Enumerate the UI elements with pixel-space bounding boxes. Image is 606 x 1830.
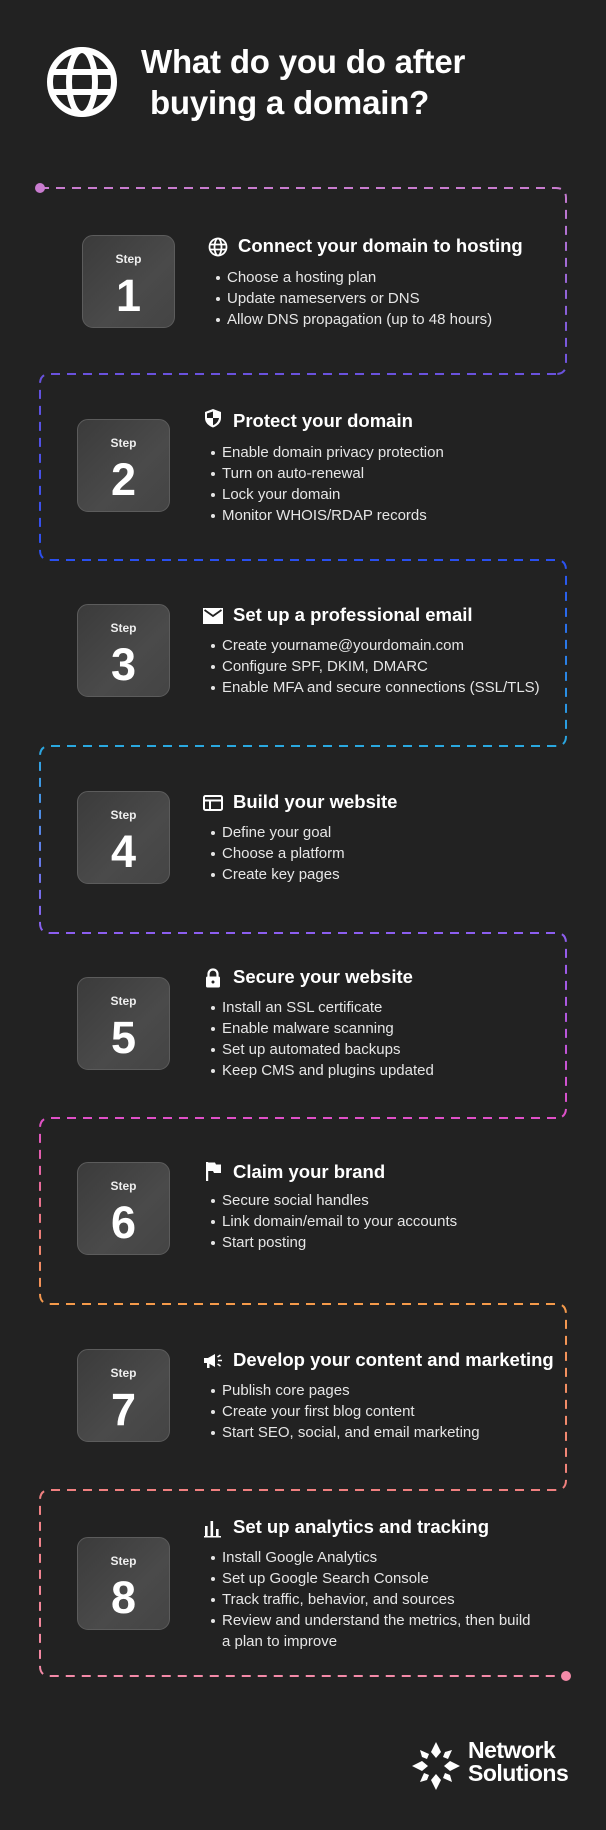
step 2 [77,409,444,524]
step 6: Link domain/email to your accounts [222,1213,457,1230]
logo: Network Solutions [412,1737,568,1790]
icon: padlock [206,968,220,988]
step 3: 3 [111,639,136,690]
step 5: Enable malware scanning [222,1020,394,1037]
icon: megaphone [204,1354,222,1368]
step 4 [77,791,397,884]
step 2: 2 [111,454,136,505]
step 3: Step [110,621,136,635]
step 5: Set up automated backups [222,1041,400,1058]
step 4: Create key pages [222,866,340,883]
step 5: Step [110,994,136,1008]
step 3: Create yourname@yourdomain.com [222,637,464,654]
logo: Network Solutions: Network [468,1737,555,1763]
step 7: Publish core pages [222,1382,350,1399]
step 7 [77,1349,554,1442]
title: What do you do after [141,43,465,80]
step 5: Keep CMS and plugins updated [222,1062,434,1079]
step 3: Configure SPF, DKIM, DMARC [222,658,428,675]
icon: flag [206,1162,221,1181]
step 8: Set up Google Search Console [222,1570,429,1587]
icon: shield [205,409,221,428]
title: buying a domain? [150,84,429,121]
step 2: Step [110,436,136,450]
step 2: Lock your domain [222,486,340,503]
step 5: Install an SSL certificate [222,999,382,1016]
step 6: Step [110,1179,136,1193]
logo: Network Solutions: Solutions [468,1760,568,1786]
step 6 [77,1161,457,1255]
step 1: Allow DNS propagation (up to 48 hours) [227,311,492,328]
step 8: Review and understand the metrics, then build [222,1612,531,1629]
step 6: Claim your brand [233,1161,385,1182]
step 1: Choose a hosting plan [227,269,376,286]
step 6: Secure social handles [222,1192,369,1209]
step 4: 4 [111,826,136,877]
step 4: Build your website [233,791,397,812]
step 5 [77,966,434,1079]
step 5: Secure your website [233,966,413,987]
step 1 [82,235,523,328]
icon: envelope [203,608,223,624]
icon: browser window [203,795,223,811]
step 1: Update nameservers or DNS [227,290,420,307]
step 2: Monitor WHOIS/RDAP records [222,507,427,524]
step 1: 1 [116,270,141,321]
step 7: Develop your content and marketing [233,1349,554,1370]
icon: title globe [47,47,117,117]
step 8: Install Google Analytics [222,1549,377,1566]
step 8: a plan to improve [222,1633,337,1650]
step 5: 5 [111,1012,136,1063]
step 3 [77,604,540,697]
step 7: Step [110,1366,136,1380]
icon: bar chart [204,1521,221,1538]
step 3: Set up a professional email [233,604,473,625]
step 8: Set up analytics and tracking [233,1516,489,1537]
step 4: Define your goal [222,824,331,841]
step 8: Track traffic, behavior, and sources [222,1591,455,1608]
step 6: 6 [111,1197,136,1248]
step 6: Start posting [222,1234,306,1251]
step 4: Choose a platform [222,845,345,862]
step 7: 7 [111,1384,136,1435]
title [141,43,465,121]
step 7: Create your first blog content [222,1403,415,1420]
icon: globe [208,238,228,256]
step 2: Turn on auto-renewal [222,465,364,482]
icon: logo mark [412,1742,460,1790]
step 8 [77,1516,531,1650]
step 8: Step [110,1554,136,1568]
step 7: Start SEO, social, and email marketing [222,1424,480,1441]
step 3: Enable MFA and secure connections (SSL/TLS) [222,679,540,696]
step 2: Protect your domain [233,410,413,431]
step 1: Step [115,252,142,266]
step 2: Enable domain privacy protection [222,444,444,461]
step 1: Connect your domain to hosting [238,235,523,256]
step 4: Step [110,808,136,822]
step 8: 8 [111,1572,136,1623]
